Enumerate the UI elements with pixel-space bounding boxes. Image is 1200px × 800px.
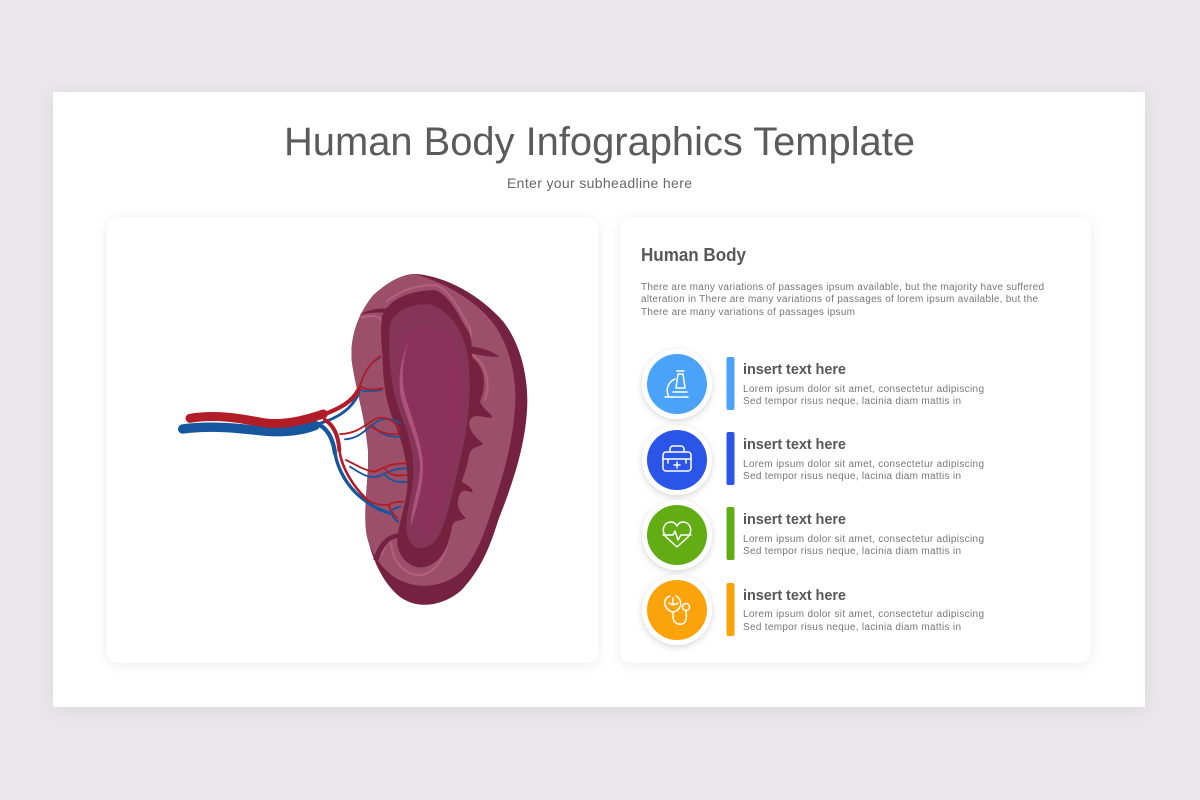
- panel: text card: [620, 217, 1091, 663]
- item text: Sed tempor risus neque, lacinia diam mattis in: [743, 546, 961, 557]
- icon: stethoscope: [642, 575, 712, 645]
- slide card: [53, 92, 1145, 707]
- item text: [743, 512, 984, 557]
- item text: insert text here: [743, 437, 846, 453]
- accent bar: [726, 507, 734, 560]
- item text: [743, 588, 984, 633]
- paragraph: There are many variations of passages ipsum available, but the majority have suffered: [641, 282, 1044, 293]
- item text: [743, 437, 984, 482]
- artery: [190, 356, 407, 518]
- item text: Sed tempor risus neque, lacinia diam mattis in: [743, 396, 961, 407]
- accent bar: [726, 357, 734, 410]
- item text: insert text here: [743, 588, 846, 604]
- accent bar: [726, 432, 734, 485]
- paragraph: alteration in There are many variations of passages of lorem ipsum available, but the: [641, 294, 1038, 305]
- spleen light tissue: [351, 275, 515, 586]
- icon: heartbeat: [642, 500, 712, 570]
- item text: Lorem ipsum dolor sit amet, consectetur adipiscing: [743, 534, 984, 545]
- icon: first aid box: [642, 425, 712, 495]
- item text: [743, 362, 984, 407]
- item text: Sed tempor risus neque, lacinia diam mattis in: [743, 622, 961, 633]
- paragraph: There are many variations of passages ipsum: [641, 307, 855, 318]
- item 1: research: [642, 349, 984, 419]
- spleen dark folds: [359, 308, 499, 560]
- item text: Sed tempor risus neque, lacinia diam mattis in: [743, 471, 961, 482]
- item 4: diagnosis: [642, 575, 984, 645]
- title: Human Body Infographics Template: [284, 120, 915, 164]
- spleen core highlight: [400, 342, 423, 527]
- spleen core centre: [399, 327, 463, 537]
- illustration: spleen with blood vessels: [183, 274, 527, 605]
- panel: illustration card: [107, 217, 598, 663]
- subtitle: Enter your subheadline here: [507, 175, 692, 191]
- item text: insert text here: [743, 362, 846, 378]
- vein: [183, 358, 407, 522]
- item text: Lorem ipsum dolor sit amet, consectetur adipiscing: [743, 459, 984, 470]
- heading: Human Body: Human Body: [641, 245, 746, 265]
- spleen outer rim: [351, 274, 527, 605]
- item text: insert text here: [743, 512, 846, 528]
- spleen inner dark zone: [381, 290, 492, 568]
- spleen inner core: [389, 304, 470, 548]
- item 3: heart health: [642, 500, 984, 570]
- icon: microscope: [642, 349, 712, 419]
- item text: Lorem ipsum dolor sit amet, consectetur adipiscing: [743, 609, 984, 620]
- paragraph: [641, 282, 1044, 318]
- item 2: medical kit: [642, 425, 984, 495]
- accent bar: [726, 583, 734, 636]
- spleen seam highlight: [362, 285, 488, 575]
- item text: Lorem ipsum dolor sit amet, consectetur adipiscing: [743, 384, 984, 395]
